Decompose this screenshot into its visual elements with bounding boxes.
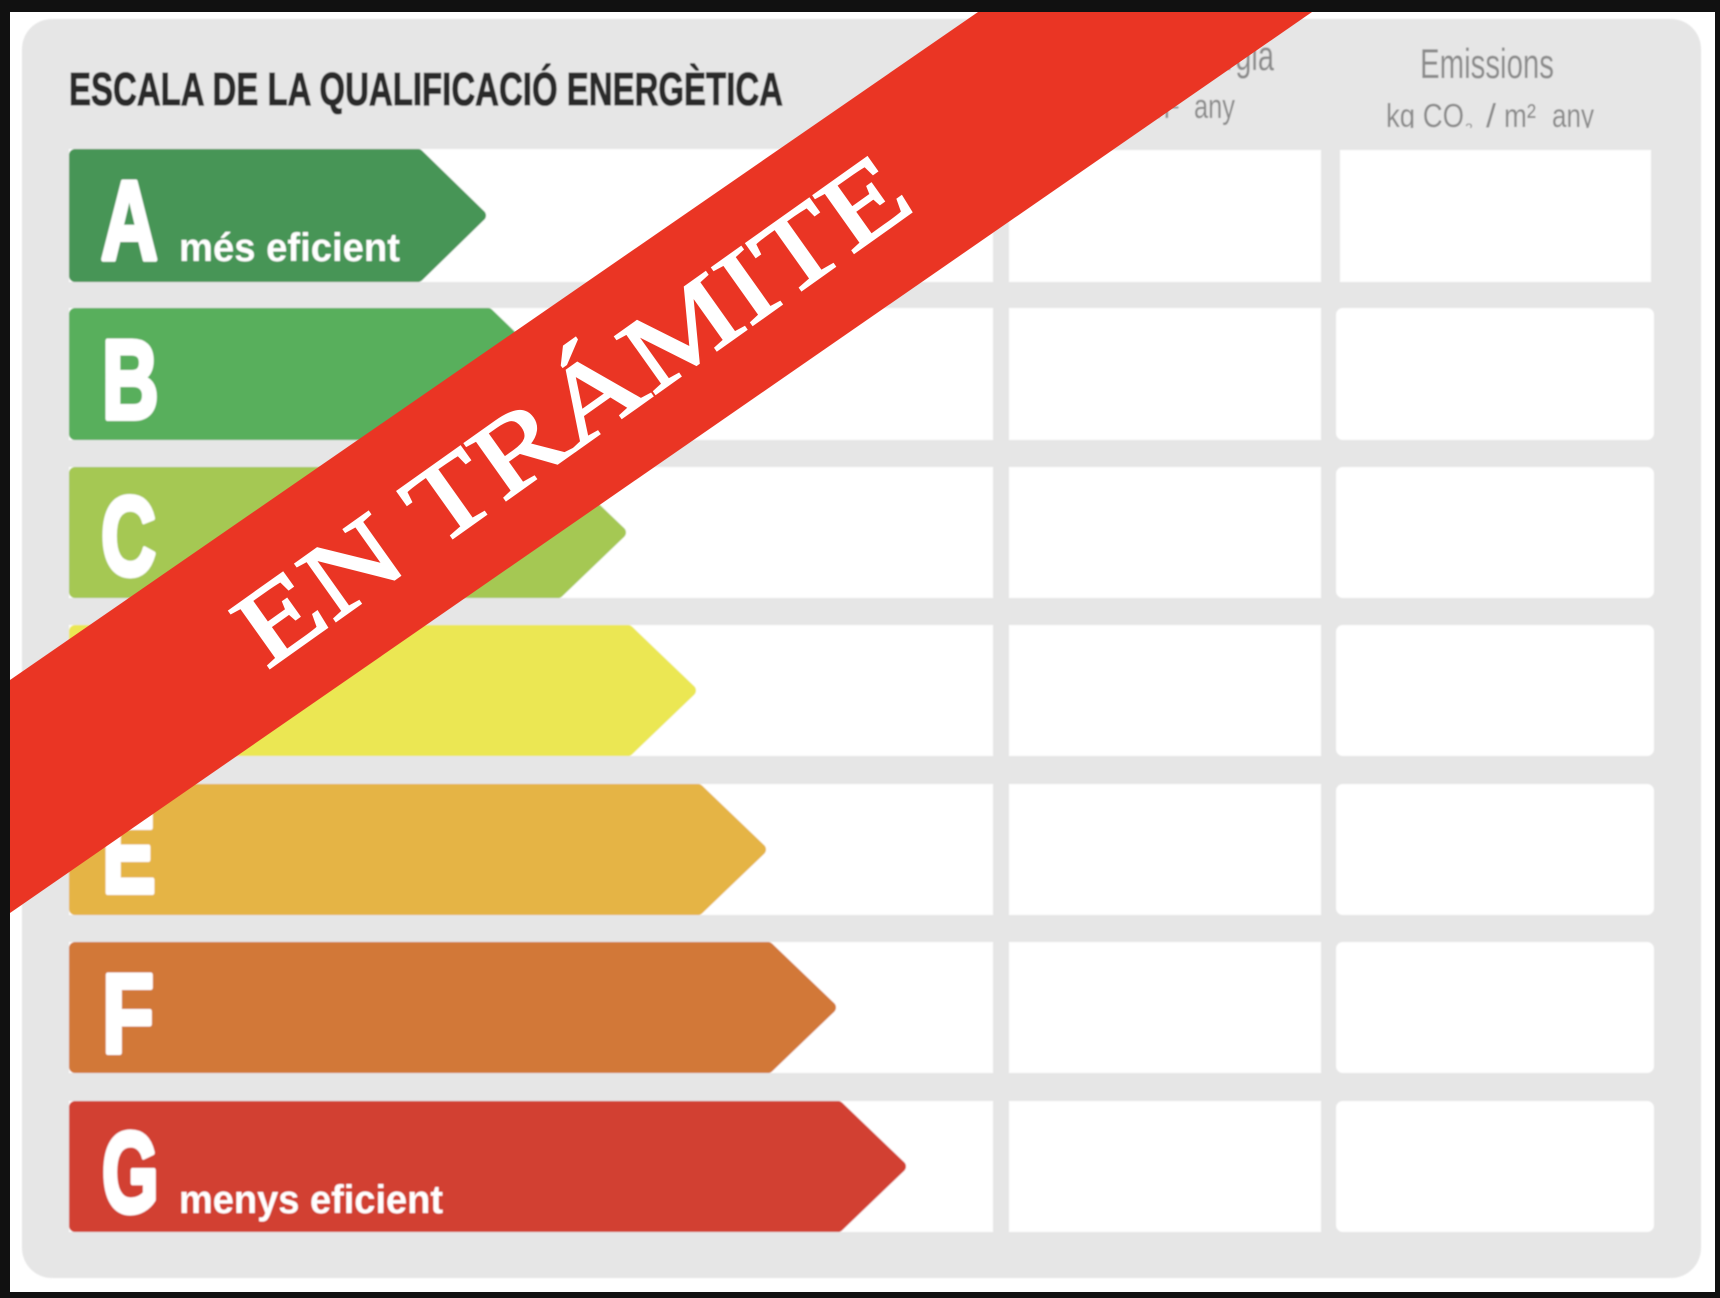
rating bar G: menys eficient	[179, 1178, 443, 1222]
table cells	[69, 149, 1654, 1232]
rating bar B: B	[102, 318, 159, 443]
rating bar D	[75, 631, 690, 760]
column header: emissions	[1387, 46, 1594, 129]
column header: emissions: Emissions	[1420, 40, 1554, 87]
rating bar F: F	[102, 952, 154, 1077]
column header: emissions: 2	[1465, 120, 1473, 136]
rating bar A: més eficient	[179, 226, 400, 270]
column header: energy: m²	[1147, 88, 1179, 126]
column header: emissions: m²	[1504, 97, 1536, 134]
column header: energy: kWh /	[1060, 88, 1138, 126]
rating bar C: C	[101, 474, 156, 600]
rating bar E	[75, 790, 760, 917]
rating bar A	[75, 155, 480, 284]
column header: energy	[1060, 32, 1274, 126]
column header: emissions: /	[1486, 97, 1497, 134]
rating bar G: G	[102, 1109, 159, 1237]
rating bar E: E	[102, 792, 156, 917]
rating bar C	[75, 473, 620, 600]
diagonal ribbon: en trámite: EN TRÁMITE	[213, 131, 931, 690]
rating bar B	[75, 314, 550, 443]
column header: energy: Energia	[1174, 32, 1274, 79]
rating bar F	[75, 948, 830, 1077]
rating bar A: A	[101, 159, 158, 284]
column header: emissions: kg CO	[1386, 97, 1464, 134]
rating bar D: D	[102, 635, 159, 760]
heading: ESCALA DE LA QUALIFICACIÓ ENERGÈTICA	[69, 63, 783, 115]
column header: energy: any	[1194, 88, 1235, 126]
column header: emissions: any	[1552, 97, 1594, 134]
rating bar G	[75, 1107, 900, 1237]
